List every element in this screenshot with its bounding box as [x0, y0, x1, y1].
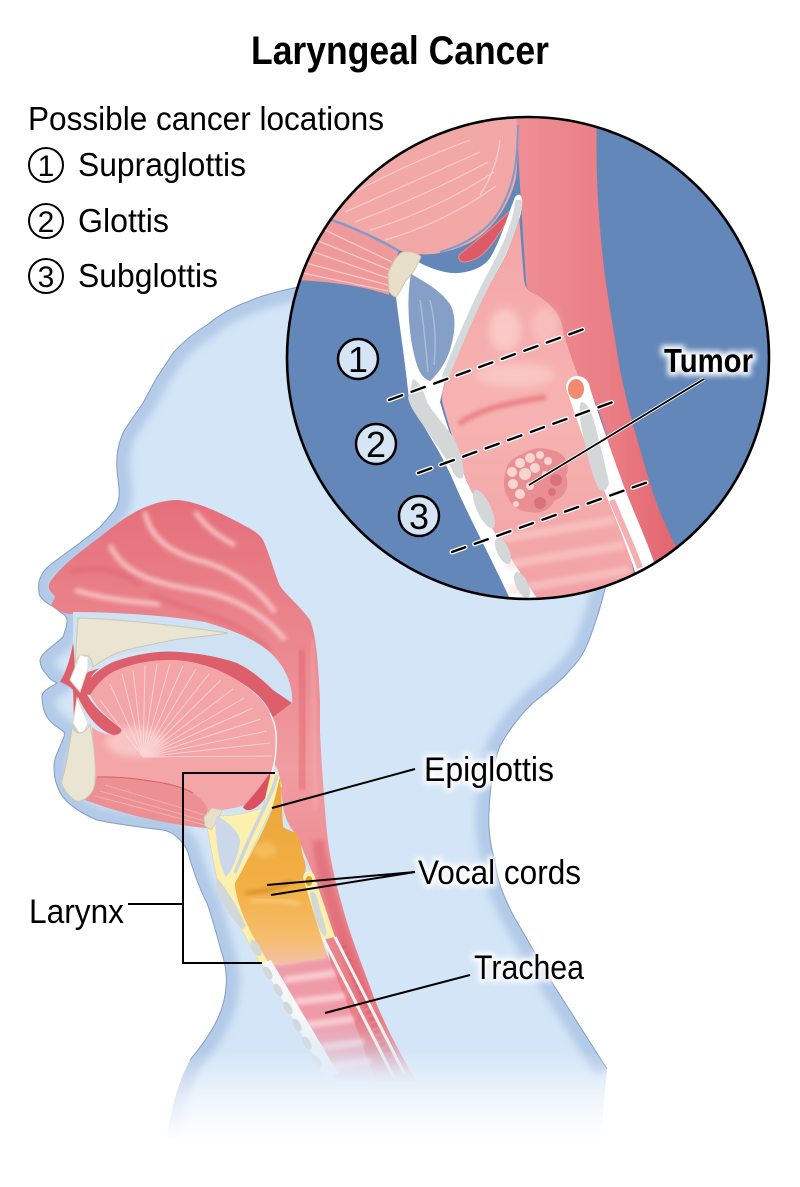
organ fade	[240, 1020, 440, 1082]
hyoid muscle	[290, 219, 399, 295]
lips	[60, 643, 121, 735]
larynx cream tissue	[207, 771, 282, 966]
oral cavity	[73, 612, 292, 704]
vocal cords label: Vocal cords	[418, 854, 581, 892]
circle marker 3: 3	[409, 496, 429, 537]
jaw bone	[62, 725, 95, 802]
nasal cavity and pharynx	[49, 500, 425, 1095]
membrane small	[216, 815, 240, 877]
hyoid bone	[388, 252, 421, 297]
vocal cords label: Vocal cords	[418, 854, 581, 892]
trachea label: Trachea	[474, 949, 584, 987]
legend item 1: 1	[38, 150, 54, 183]
tumor callout: Tumor	[664, 342, 753, 379]
trachea label: Trachea	[474, 949, 584, 987]
white tissue	[396, 195, 545, 610]
legend heading: Possible cancer locations	[28, 100, 384, 137]
tumor callout: Tumor	[664, 342, 753, 379]
hyoid small	[204, 808, 222, 830]
arytenoid small	[303, 871, 405, 1080]
epiglottis label: Epiglottis	[424, 751, 554, 789]
membrane in circle	[408, 274, 454, 381]
teeth	[70, 655, 88, 737]
pharynx wall in circle	[516, 110, 680, 600]
tumor callout	[529, 342, 753, 485]
vocal fold line	[459, 397, 546, 424]
epiglottis label: Epiglottis	[424, 751, 554, 789]
larynx label with bracket	[29, 773, 275, 963]
fade at the bottom	[100, 1050, 700, 1140]
tracheal strip small	[248, 938, 338, 1080]
title: Laryngeal Cancer	[251, 29, 549, 73]
epiglottis small	[235, 775, 277, 873]
tongue in circle	[332, 118, 518, 254]
larynx interior	[442, 215, 640, 610]
dark sliver	[458, 210, 510, 262]
arytenoid in circle	[566, 376, 655, 575]
circle marker 1: 1	[348, 339, 368, 380]
circle marker 2: 2	[366, 424, 386, 465]
circle marker 3	[399, 496, 439, 537]
legend item 3: Subglottis	[78, 257, 218, 294]
legend: possible cancer locations	[28, 100, 384, 294]
epiglottis label	[272, 751, 554, 808]
vocal cords label	[267, 854, 581, 895]
tumor	[504, 448, 568, 513]
trachea label	[325, 949, 584, 1013]
head silhouette	[38, 287, 607, 1150]
larynx orange highlight	[235, 777, 326, 966]
palate bone	[75, 618, 228, 667]
tracheal rings in circle	[473, 490, 530, 598]
trachea	[262, 945, 380, 1095]
thyroid cartilage in circle	[408, 379, 464, 479]
section dashed lines	[389, 329, 648, 552]
tongue	[80, 651, 292, 828]
magnified circle	[287, 110, 769, 610]
epiglottis in circle	[445, 200, 519, 378]
legend item 2: Glottis	[78, 202, 169, 239]
larynx label with bracket: Larynx	[29, 893, 124, 931]
legend item 2: 2	[38, 206, 54, 239]
circle marker 1	[338, 339, 378, 380]
legend item 3: 3	[38, 261, 54, 294]
circle marker 2	[356, 424, 396, 465]
thyroid cartilage small	[216, 878, 246, 929]
legend item 1: Supraglottis	[78, 146, 246, 183]
legend item 2	[29, 202, 169, 239]
